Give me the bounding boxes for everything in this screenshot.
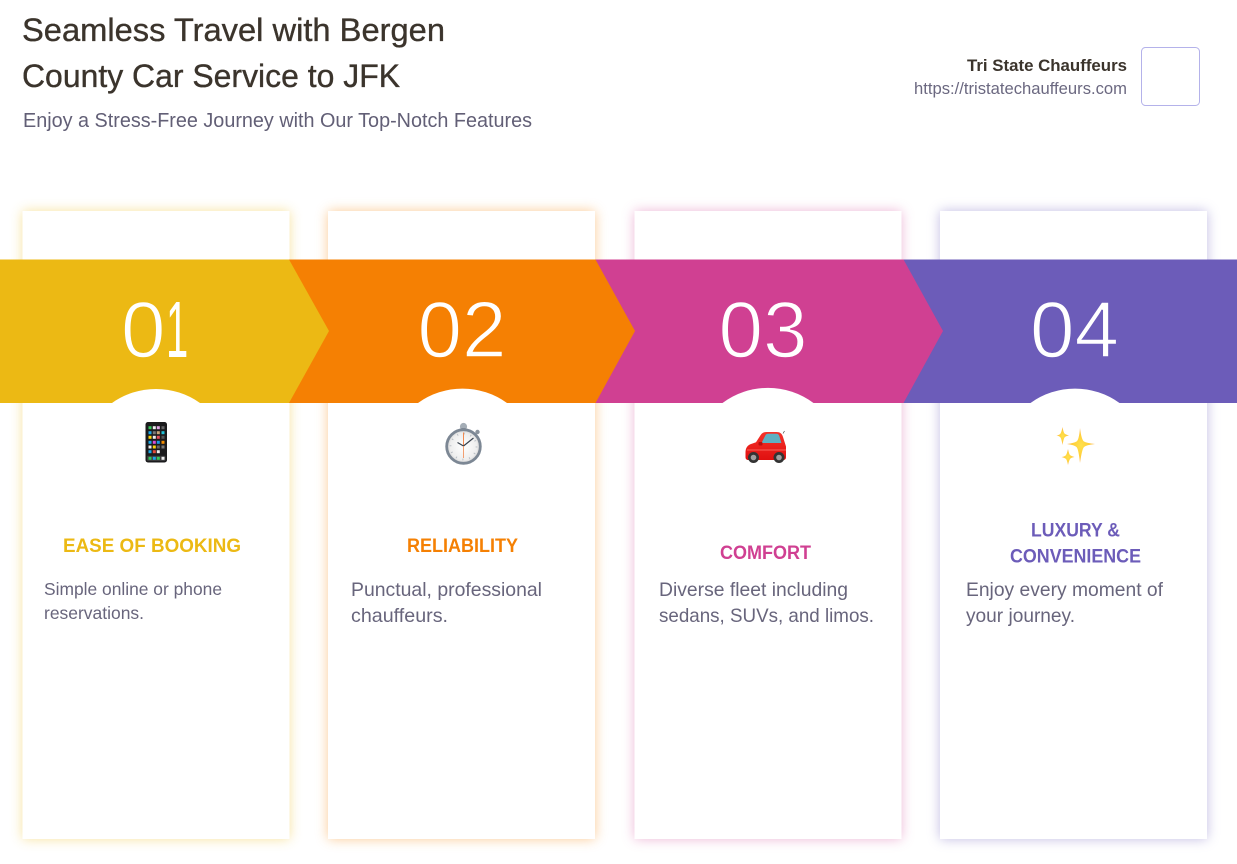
brand block	[914, 48, 1200, 106]
heading: ease of booking: EASE OF BOOKING	[63, 536, 241, 557]
heading: luxury and convenience: CONVENIENCE	[1010, 546, 1141, 568]
description: luxury and convenience	[966, 579, 1164, 627]
description: ease of booking: reservations.	[44, 603, 144, 623]
description: ease of booking: Simple online or phone	[44, 579, 222, 599]
description: comfort: Diverse fleet including	[659, 579, 848, 601]
description: reliability: Punctual, professional	[351, 579, 542, 601]
description: reliability	[351, 579, 542, 627]
step 3 arrow	[560, 260, 943, 403]
icon: car	[746, 431, 786, 463]
heading: reliability: RELIABILITY	[407, 536, 518, 557]
icon: sparkles	[1056, 427, 1095, 465]
panel: comfort	[634, 211, 902, 839]
description: luxury and convenience: your journey.	[966, 605, 1075, 627]
heading: luxury and convenience	[1010, 520, 1141, 568]
chevron band	[0, 260, 1237, 403]
step 2 arrow	[260, 260, 635, 403]
step 4 arrow	[880, 260, 1237, 403]
heading: comfort: COMFORT	[720, 543, 811, 564]
brand block: Tri State Chauffeurs	[967, 56, 1127, 75]
header title: Seamless Travel with Bergen	[22, 12, 445, 48]
description: comfort: sedans, SUVs, and limos.	[659, 605, 874, 627]
description: comfort	[659, 579, 874, 627]
header title	[22, 12, 445, 94]
icon: mobile phone	[146, 422, 167, 462]
step 1 arrow: 0	[121, 285, 166, 374]
step 1 arrow: 1	[166, 286, 188, 375]
header title: County Car Service to JFK	[22, 58, 400, 94]
step 1 arrow	[0, 260, 329, 403]
icon: stopwatch	[447, 423, 480, 463]
description: ease of booking	[44, 579, 222, 623]
step 4 arrow: 04	[1030, 285, 1119, 374]
panel: reliability	[328, 211, 595, 839]
step 2 arrow: 02	[418, 285, 506, 374]
step 3 arrow: 03	[719, 285, 807, 374]
heading: luxury and convenience: LUXURY &	[1031, 520, 1120, 542]
panel: luxury and convenience	[940, 211, 1207, 839]
description: luxury and convenience: Enjoy every moment of	[966, 579, 1164, 601]
panel: ease of booking	[22, 211, 290, 839]
brand block: https://tristatechauffeurs.com	[914, 80, 1127, 98]
description: reliability: chauffeurs.	[351, 605, 448, 627]
subtitle: Enjoy a Stress-Free Journey with Our Top-Notch Features	[23, 110, 532, 132]
